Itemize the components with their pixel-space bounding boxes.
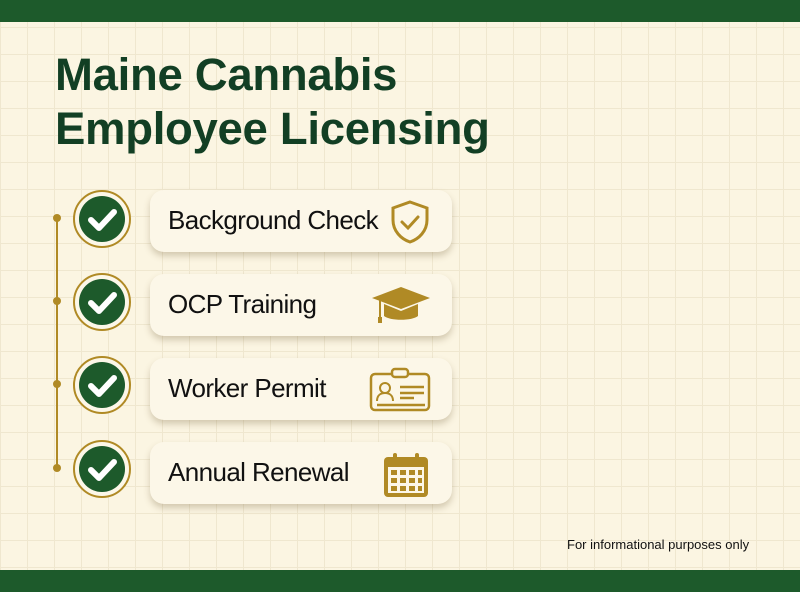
footer note: For informational purposes only [567, 537, 749, 552]
icon: calendar [384, 453, 428, 497]
icon: shield [392, 200, 428, 244]
card: worker permit [150, 358, 452, 420]
timeline dot 1 [53, 214, 61, 222]
card: OCP training: OCP Training [168, 289, 316, 319]
timeline dot 3 [53, 380, 61, 388]
timeline line [56, 216, 58, 470]
card: background check [150, 190, 452, 252]
icon: graduation cap [372, 287, 430, 323]
check icon 2 [73, 273, 131, 331]
icon: id badge [370, 368, 430, 412]
check icon 3 [73, 356, 131, 414]
card: annual renewal [150, 442, 452, 504]
check icon 1 [73, 190, 131, 248]
timeline dot 4 [53, 464, 61, 472]
timeline dot 2 [53, 297, 61, 305]
card: worker permit: Worker Permit [168, 373, 326, 403]
title: Maine Cannabis [55, 49, 397, 100]
bottom bar [0, 570, 800, 592]
card: annual renewal: Annual Renewal [168, 457, 349, 487]
card: background check: Background Check [168, 205, 378, 235]
card: OCP training [150, 274, 452, 336]
check icon 4 [73, 440, 131, 498]
top bar [0, 0, 800, 22]
title [55, 49, 490, 154]
title: Employee Licensing [55, 103, 490, 154]
